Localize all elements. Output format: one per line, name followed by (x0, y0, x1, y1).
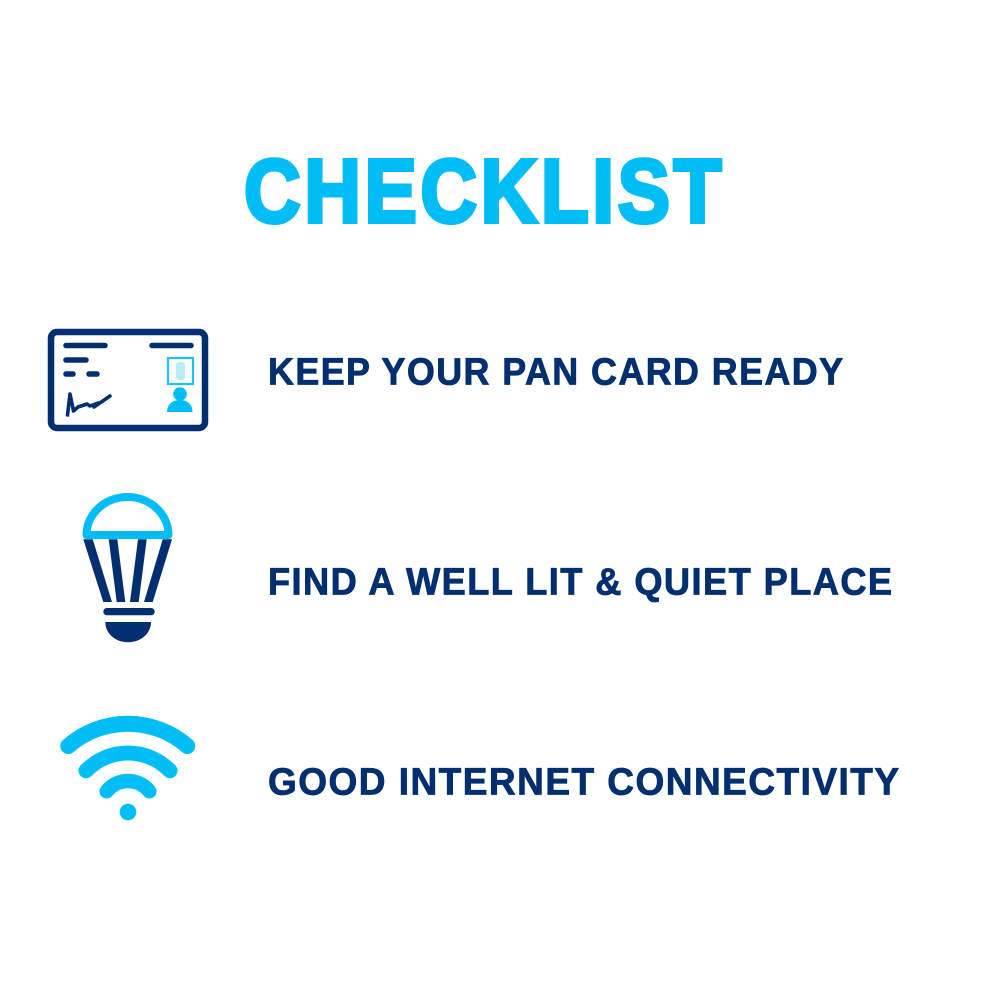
title: CHECKLIST (244, 142, 725, 242)
label: well lit place: FIND A WELL LIT & QUIET PLACE (268, 562, 894, 604)
icon: PAN card (51, 332, 205, 428)
label: PAN card: KEEP YOUR PAN CARD READY (268, 352, 844, 394)
icon: wifi (68, 724, 187, 820)
icon: light bulb (83, 497, 172, 642)
label: internet connectivity: GOOD INTERNET CONNECTIVITY (268, 762, 900, 804)
